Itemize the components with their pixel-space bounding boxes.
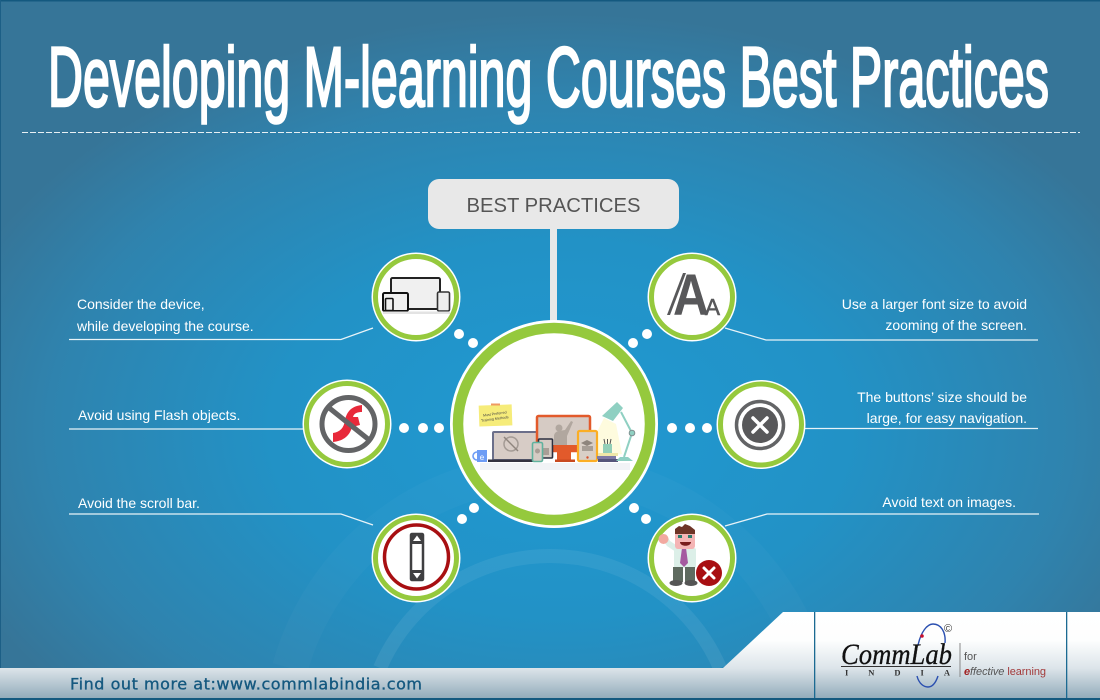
phone teal <box>532 442 542 462</box>
leader line: device <box>69 328 373 340</box>
icon: no flash <box>302 380 392 468</box>
leader line: font <box>725 328 1038 340</box>
heading box: best practices: BEST PRACTICES <box>466 195 640 217</box>
text: consider the device: Consider the device, <box>77 296 205 312</box>
text: larger font: zooming of the screen. <box>885 317 1027 333</box>
text: button size: The buttons’ size should be <box>857 389 1027 405</box>
icon: no scroll bar <box>372 514 460 602</box>
text: avoid text on images: Avoid text on images. <box>882 494 1016 510</box>
dots: middle-right <box>667 423 712 433</box>
sticky note <box>479 404 512 427</box>
text: avoid flash: Avoid using Flash objects. <box>78 407 240 423</box>
lamp glow <box>594 418 622 458</box>
leader line: buttons <box>805 428 1038 430</box>
text: avoid scroll bar: Avoid the scroll bar. <box>78 495 200 511</box>
heading box: best practices <box>428 179 679 229</box>
text: consider the device: while developing the course. <box>76 318 254 334</box>
logo: CommLab India: effective learning <box>964 666 1046 678</box>
footer bar <box>0 612 1100 700</box>
man figure <box>658 524 698 586</box>
text: larger font: Use a larger font size to avoid <box>842 296 1027 312</box>
dots: top-left <box>454 329 478 348</box>
central hub illustration <box>450 320 658 528</box>
dots: top-right <box>628 329 652 348</box>
sticky note: Most Preferred <box>483 410 507 418</box>
tablet dark <box>538 439 552 458</box>
icon: large font: A <box>705 294 721 320</box>
leader line: flash <box>69 428 304 430</box>
monitor <box>537 416 590 462</box>
leader line: scroll bar <box>69 514 373 525</box>
dots: middle-left <box>399 423 444 433</box>
icon: man with cross <box>648 514 736 602</box>
dots: bottom-right <box>629 503 651 524</box>
footer link text: Find out more at:www.commlabindia.com <box>70 674 422 694</box>
leader line: text on images <box>725 514 1039 526</box>
text: larger font <box>842 296 1027 333</box>
red cross badge <box>696 560 722 586</box>
text: consider the device <box>76 296 254 334</box>
tablet yellow <box>578 431 597 461</box>
logo: CommLab India: © <box>944 623 952 635</box>
text: button size <box>857 389 1027 426</box>
logo: CommLab India <box>841 623 1046 687</box>
icon: large font: A <box>673 263 709 328</box>
sticky note: Training Methods <box>481 415 509 423</box>
laptop <box>488 432 538 462</box>
connector stem <box>550 228 557 322</box>
desk lamp <box>602 402 635 461</box>
mug <box>473 450 487 462</box>
logo: CommLab India: INDIA <box>845 668 951 678</box>
icon: devices <box>372 252 460 342</box>
text: button size: large, for easy navigation. <box>867 410 1027 426</box>
books and pencil cup <box>597 439 618 462</box>
icon: large font <box>648 252 736 342</box>
icon: large button <box>716 380 806 469</box>
logo: CommLab India: for <box>964 651 977 663</box>
reflection <box>480 463 630 470</box>
mug: e <box>480 453 485 462</box>
dots: bottom-left <box>457 503 479 524</box>
logo: CommLab India: CommLab <box>841 638 952 671</box>
